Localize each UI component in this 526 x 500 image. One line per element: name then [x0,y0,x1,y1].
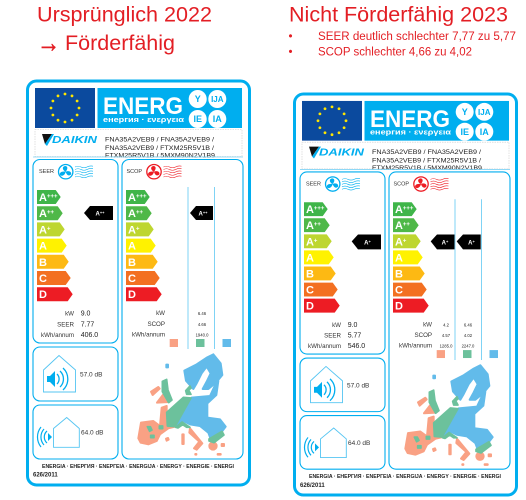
values: SCOP: kW [423,321,432,328]
energy class scale: SCOP: +++ [403,206,414,212]
panel: outdoor noise: 64.0 dB [348,440,370,447]
heading: not eligible 2023: Nicht Förderfähig 2023 [289,3,508,27]
banner: energy title: IE [460,127,469,137]
energy class scale: SEER: D [306,301,314,313]
supplier and model row: FNA35A2VEB9 / FTXM25R5V1B / [105,145,214,152]
supplier and model row [33,130,243,160]
panel: indoor noise: 57.0 dB [80,372,102,378]
energy class scale: SEER: A [39,208,47,220]
energy class scale: SCOP [126,190,162,301]
supplier and model row: FTXM25R5V1B / 5MXM90N2V1B9 [105,152,216,160]
values: SCOP: 4.02 [464,333,473,338]
icon: heating fan [414,177,448,191]
energy class scale: SCOP: +++ [136,194,147,200]
bullet list: reasons: • [288,31,293,43]
rating arrow: SCOP zone one A+: A [442,240,446,246]
legend: climate zone colours [437,350,498,358]
energy class scale: SCOP: A [128,192,136,204]
values: SCOP: SCOP [147,321,165,328]
rating arrow: SCOP A++ [190,206,213,220]
energy class scale: SEER: C [39,273,47,285]
values: SCOP [132,310,209,338]
rating arrow: SCOP A++: A [198,212,203,218]
energy class scale: SEER: A [306,252,314,264]
banner: energy title: енергия · ενεργεια [103,115,184,124]
rating arrow: SEER A+: + [368,239,372,244]
values: SEER: kW [332,322,341,329]
bullet list: reasons: SCOP schlechter 4,66 zu 4,02 [318,46,472,58]
energy class scale: SEER: D [39,289,47,301]
supplier and model row: DAIKIN [52,135,98,146]
panel: indoor noise [33,347,118,401]
energy class scale: SCOP: A [128,208,136,220]
values: SEER: kWh/annum [41,332,74,339]
values: SEER: SEER [324,333,342,340]
panel: SCOP [389,172,510,469]
rating arrow: SCOP A++: ++ [203,210,208,215]
icon: house with speaker [44,356,76,392]
icon: EU flag [302,101,362,141]
values: SCOP: 6.46 [464,322,473,327]
values: SCOP: 1285.0 [440,344,453,349]
values: SCOP: kWh/annum [399,343,432,350]
energy class scale: SCOP: A [128,241,136,253]
heading: original 2022: → [37,27,60,58]
footer: languages and regulation: 626/2011 [300,483,325,489]
rating arrow: SCOP zone one A+ [431,234,454,249]
climate zone column lines [188,187,214,349]
rating arrow: SEER A++: ++ [100,210,105,215]
panel: energy label 2022 [28,81,250,485]
bullet list: reasons [288,31,516,58]
energy class scale: SEER: A [306,204,314,216]
values: SEER [41,310,98,339]
energy class scale: SEER: B [306,268,314,280]
climate zone column lines [455,199,482,360]
values: SCOP: kWh/annum [132,332,165,338]
supplier and model row: FNA35A2VEB9 / FNA35A2VEB9 / [372,149,481,156]
banner: energy title: ENERG [370,106,450,133]
energy class scale: SCOP: A [395,220,403,232]
values: SCOP: SCOP [414,332,432,339]
energy class scale: SCOP: A [395,204,403,216]
map: European climate zones [138,354,226,455]
icon: house with outdoor sound [304,428,346,458]
rating arrow: SEER A+ [352,234,381,249]
banner: energy title: енергия · ενεργεια [370,128,451,137]
footer: languages and regulation: ENERGIA · ЕНЕРГИЯ · ENEPГЕIA · ENERGIJA · ENERGY · ENERGIE · ENERGI [309,474,501,480]
supplier and model row: DAIKIN [319,148,365,159]
banner: energy title: IA [480,127,489,137]
values: SCOP [399,321,475,350]
energy class scale: SCOP: D [395,301,403,313]
values: SEER: kW [65,310,74,318]
energy class scale: SCOP: C [128,273,136,285]
energy class scale: SEER [37,190,73,301]
panel: outdoor noise [33,405,118,459]
values: SEER: 5.77 [348,333,361,340]
values: SEER [308,322,365,350]
energy class scale: SCOP: + [136,226,140,232]
energy class scale: SCOP: ++ [136,210,143,216]
energy class scale: SEER: + [314,238,318,244]
energy class scale: SCOP: B [395,268,403,280]
panel: SEER [300,172,385,354]
rating arrow: SCOP zone two A+ [457,234,481,249]
rating arrow: SCOP zone two A+: A [468,240,472,246]
energy class scale: SCOP: + [403,238,407,244]
banner: energy title: IE [193,114,202,124]
banner: energy title [98,88,242,128]
bullet list: reasons: SEER deutlich schlechter 7,77 zu 5,77 [318,31,516,43]
panel: SEER [33,160,118,343]
rating arrow: SCOP zone one A+: + [446,239,449,244]
panel: outdoor noise: 64.0 dB [81,430,103,436]
footer: languages and regulation [300,474,501,489]
icon: cooling fan [326,177,360,191]
heading: original 2022 [37,3,212,58]
energy class scale: SEER: B [39,257,47,269]
energy class scale: SCOP: A [128,224,136,236]
panel: indoor noise [300,358,385,412]
energy class scale: SEER: +++ [47,194,58,200]
bullet list: reasons: • [288,46,293,58]
footer: languages and regulation: ENERGIA · ЕНЕРГИЯ · ENEPГЕIA · ENERGIJA · ENERGY · ENERGIE · ENERGI [42,464,234,470]
icon: house with speaker [310,366,342,403]
values: SEER: 406.0 [81,332,98,339]
energy class scale: SEER: A [306,220,314,232]
map: European climate zones [405,365,493,465]
energy class scale: SEER: A [306,236,314,248]
values: SEER: 9.0 [81,310,91,318]
panel: SEER: SEER [306,181,321,187]
energy class scale: SCOP: C [395,285,403,297]
icon: EU flag [35,88,95,128]
panel: SCOP: SCOP [126,169,142,175]
panel: SEER: SEER [39,169,54,175]
values: SCOP: 4.2 [443,322,450,327]
energy class scale: SEER: +++ [314,206,325,212]
icon: heating fan [147,164,182,179]
supplier and model row: FTXM25R5V1B / 5MXM90N2V1B9 [372,165,483,172]
rating arrow: SEER A++: A [95,212,100,218]
rating arrow: SCOP zone two A+: + [472,239,476,244]
energy class scale: SEER: ++ [314,222,321,228]
panel: SCOP: SCOP [393,181,409,187]
energy class scale: SEER: ++ [47,210,54,216]
rating arrow: SEER A+: A [364,240,368,246]
icon: house with outdoor sound [37,418,79,447]
banner: energy title: IA [213,114,222,124]
legend: climate zone colours [170,339,231,347]
values: SEER: 9.0 [348,322,358,329]
banner: energy title: ENERG [103,93,183,120]
supplier and model row: FNA35A2VEB9 / FNA35A2VEB9 / [105,137,214,144]
values: SEER: 7.77 [81,322,94,328]
rating arrow: SEER A++ [84,206,113,220]
heading: original 2022: Förderfähig [65,31,175,55]
energy class scale: SCOP [393,202,429,313]
values: SEER: 546.0 [348,343,365,350]
footer: languages and regulation [33,464,234,479]
values: SEER: SEER [57,322,75,328]
values: SCOP: 6.46 [198,311,207,316]
panel: outdoor noise [300,416,385,469]
banner: energy title: IJA [211,95,224,104]
values: SCOP: kW [156,310,165,317]
supplier and model row: FNA35A2VEB9 / FTXM25R5V1B / [372,158,481,164]
energy class scale: SEER: A [39,241,47,253]
values: SCOP: 2247.0 [462,344,475,349]
panel: indoor noise: 57.0 dB [347,382,369,389]
energy class scale: SCOP: A [395,236,403,248]
values: SCOP: 1940.0 [196,332,209,338]
energy class scale: SEER: C [306,285,314,297]
heading: original 2022: Ursprünglich 2022 [37,3,212,27]
energy class scale: SEER [304,202,340,313]
energy class scale: SCOP: A [395,252,403,264]
energy class scale: SEER: A [39,224,47,236]
panel: SCOP [122,160,243,459]
energy class scale: SEER: + [47,226,51,232]
icon: cooling fan [58,164,93,179]
supplier and model row [300,142,510,172]
banner: energy title: Y [462,107,468,117]
energy class scale: SCOP: ++ [403,222,410,228]
energy class scale: SCOP: B [128,257,136,269]
banner: energy title [364,101,509,141]
banner: energy title: Y [195,94,201,104]
panel: energy label 2023 [294,94,516,495]
footer: languages and regulation: 626/2011 [33,473,58,479]
values: SCOP: 4.57 [442,333,451,338]
energy class scale: SCOP: D [128,289,136,301]
energy class scale: SEER: A [39,192,47,204]
banner: energy title: IJA [478,108,491,117]
values: SCOP: 4.66 [198,322,207,327]
values: SEER: kWh/annum [308,343,341,350]
